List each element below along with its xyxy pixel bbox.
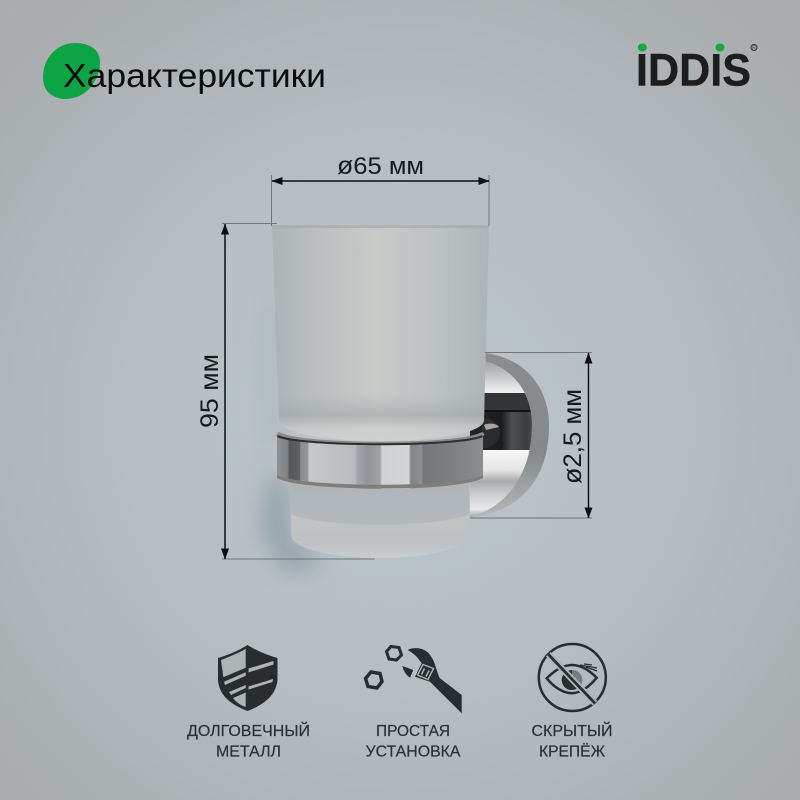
feature: easy install: УСТАНОВКА bbox=[366, 744, 461, 760]
label: ПРОСТАЯ bbox=[376, 723, 450, 740]
heading: Характеристики bbox=[63, 57, 326, 94]
feature: hidden fastening bbox=[532, 644, 612, 760]
feature: easy install bbox=[366, 646, 462, 760]
title with green blob bbox=[43, 43, 326, 99]
mount outer edge bbox=[470, 353, 549, 518]
icon: crossed eye bbox=[539, 644, 606, 711]
wall shadow bbox=[258, 470, 325, 575]
dimension: width 65 mm: ø65 мм bbox=[337, 152, 424, 180]
feature: durable metal: МЕТАЛЛ bbox=[216, 744, 281, 760]
mount dark reflection bbox=[470, 393, 532, 450]
icon: green blob bbox=[43, 43, 100, 99]
chrome ring bbox=[277, 432, 484, 489]
product: glass tumbler holder bbox=[258, 225, 549, 575]
frosted glass upper part bbox=[272, 225, 489, 441]
icon: shield bbox=[218, 645, 278, 711]
label: СКРЫТЫЙ bbox=[532, 721, 612, 740]
mount polished face bbox=[470, 361, 532, 517]
logo: IDDIS: IDDIS bbox=[636, 44, 751, 96]
glass soft shadow bbox=[262, 300, 280, 450]
feature: durable metal bbox=[187, 645, 310, 760]
icon: wrench and nuts bbox=[366, 646, 462, 713]
dimension: height 95 mm: 95 мм bbox=[196, 354, 224, 428]
label: ДОЛГОВЕЧНЫЙ bbox=[187, 721, 310, 740]
logo: IDDIS: R bbox=[752, 45, 756, 51]
mount screw bbox=[482, 418, 500, 449]
frosted glass lower part bbox=[290, 480, 469, 558]
feature: hidden fastening: КРЕПЁЖ bbox=[539, 742, 605, 760]
wall mount disc bbox=[470, 353, 549, 518]
dimension: diameter 2.5 mm: ø2,5 мм bbox=[557, 389, 587, 484]
